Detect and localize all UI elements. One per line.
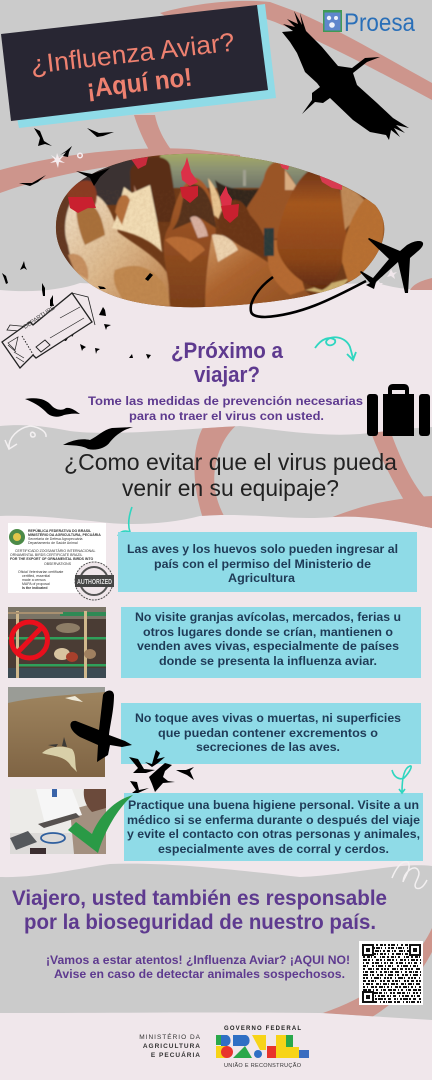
text box: venden aves vivas, especialmente de países <box>137 639 399 653</box>
text box: que puedan contener excrementos o <box>158 726 378 740</box>
text box: No toque aves vivas o muertas, ni superficies <box>135 711 401 725</box>
logo: Proesa: Proesa <box>344 9 415 37</box>
background field <box>160 150 310 188</box>
arrow: white squiggle bottom <box>392 862 427 889</box>
feather texture <box>66 190 272 271</box>
arrow: teal loop to box four <box>392 766 411 793</box>
ticket illustration: DEPARTURE <box>23 305 56 331</box>
closing statement <box>12 887 387 934</box>
text box <box>121 703 421 764</box>
dark tail <box>214 180 258 208</box>
flock of birds top <box>19 128 114 186</box>
pink ribbons top <box>0 1 432 290</box>
hen centre <box>164 178 216 308</box>
banner shadow <box>17 4 276 128</box>
flock of birds trail <box>2 261 153 359</box>
icon: prohibition sign <box>12 622 48 658</box>
text: prevention note <box>88 394 363 423</box>
row 2: markets <box>8 607 421 678</box>
text box: Practique una buena higiene personal. Visite a un <box>128 798 419 812</box>
text box <box>118 532 417 592</box>
icon: plane sparkles <box>375 269 397 288</box>
icon: airplane with trail <box>251 238 423 317</box>
arrow: white squiggle <box>5 426 46 449</box>
heading: como evitar <box>64 449 397 501</box>
hen D pale tail <box>208 178 222 222</box>
hen left wing dark <box>56 194 74 269</box>
QR code <box>359 941 423 1005</box>
top grey area <box>0 0 432 291</box>
hen back right <box>340 186 364 230</box>
document image <box>8 523 114 600</box>
call to action: Avise en caso de detectar animales sospechosos. <box>54 967 345 981</box>
closing statement: por la bioseguridad de nuestro país. <box>24 911 376 934</box>
text box: secreciones de las aves. <box>196 740 340 754</box>
cream hen top <box>112 185 162 252</box>
text box <box>121 607 421 678</box>
doctor photo <box>10 789 106 854</box>
hen D <box>217 200 266 258</box>
document image: ORNAMENTAL BIRDS CERTIFICATE BRAZIL <box>10 553 82 557</box>
heading: próximo a viajar: ¿Próximo a <box>171 338 284 363</box>
text box: médico si se enferma durante o después del viaje <box>127 813 420 827</box>
logo: ministério <box>139 1032 201 1059</box>
title text: ¡Aquí no! <box>85 62 194 103</box>
hen big <box>277 167 346 290</box>
text box: país con el permiso del Ministerio de <box>154 557 371 571</box>
text box: Agricultura <box>228 571 295 585</box>
heading: como evitar: venir en su equipaje? <box>122 475 339 501</box>
finder patterns <box>363 945 420 1002</box>
hen right <box>342 195 384 282</box>
icon: suitcase <box>367 384 430 436</box>
ticket illustration <box>2 293 95 368</box>
hen left head <box>66 180 97 208</box>
logo: ministério: AGRICULTURA <box>143 1043 201 1050</box>
heading: próximo a viajar <box>171 338 284 387</box>
combs and wattles <box>68 157 342 223</box>
text: prevention note: Tome las medidas de prevención necesarias <box>88 394 363 408</box>
hen rear right <box>246 162 294 240</box>
text box <box>124 793 423 861</box>
bottom grey band <box>0 864 432 1020</box>
hen left body <box>65 192 170 310</box>
document image: made a census <box>22 578 46 582</box>
document image: MINISTÉRIO DA AGRICULTURA, PECUÁRIA <box>28 532 101 537</box>
logo: ministério: MINISTÉRIO DA <box>139 1032 201 1041</box>
call to action: ¡Vamos a estar atentos! ¿Influenza Aviar? ¡AQUI NO! <box>46 953 350 967</box>
icon: black cross <box>70 690 132 762</box>
beach photo <box>8 687 105 777</box>
row 4: hygiene <box>10 789 423 861</box>
text box: y evite el contacto con otras personas y animales, <box>127 827 420 841</box>
document image: Secretaria de Defesa Agropecuária <box>28 537 83 541</box>
closing statement: Viajero, usted también es responsable <box>12 887 387 910</box>
hen back centre <box>130 157 180 222</box>
text box: No visite granjas avícolas, mercados, ferias u <box>135 610 401 624</box>
document image: MAPA of proposal <box>22 582 50 586</box>
title banner <box>1 4 276 128</box>
text box: Las aves y los huevos solo pueden ingresar al <box>127 542 398 556</box>
banner panel <box>1 5 268 121</box>
hen foreground <box>205 235 312 312</box>
document image: FOR THE EXPORT OF ORNAMENTAL BIRDS INTO <box>10 557 94 561</box>
row 3: do not touch <box>8 687 421 777</box>
text box: otros lugares donde se crían, mantienen o <box>143 625 393 639</box>
title text: ¿Influenza Aviar? <box>29 27 236 80</box>
market photo <box>8 607 106 678</box>
arrow: teal to first box <box>118 507 132 536</box>
logo: governo federal brasil <box>216 1026 309 1069</box>
text box: especialmente aves de corral y cerdos. <box>158 842 389 856</box>
hen big lower left <box>268 240 305 295</box>
document image: Oficial Veterinarian certificate <box>18 570 63 574</box>
icon: white sparkle <box>50 153 65 168</box>
text: prevention note: para no traer el virus con usted. <box>129 409 324 423</box>
logo: governo federal brasil: GOVERNO FEDERAL <box>224 1026 301 1032</box>
document image: Departamento de Saúde Animal <box>28 541 78 545</box>
document image: CERTIFICADO ZOOSANITÁRIO INTERNACIONAL <box>15 549 95 553</box>
text box: donde se presenta la influenza aviar. <box>159 654 377 668</box>
icon: large bird left <box>25 398 80 417</box>
logo: ministério: E PECUÁRIA <box>151 1050 201 1059</box>
heading: próximo a viajar: viajar? <box>194 362 260 387</box>
authorized stamp: AUTHORIZED <box>77 579 112 586</box>
title text <box>29 27 239 109</box>
pink ribbons middle <box>194 424 432 530</box>
icon: green check mark <box>68 795 133 853</box>
chicken photo <box>50 150 390 312</box>
logo: governo federal brasil: UNIÃO E RECONSTRUÇÃO <box>224 1062 302 1069</box>
flock of geese <box>129 750 194 793</box>
pink ribbon bottom <box>323 928 432 1017</box>
call to action <box>46 953 350 981</box>
heading: como evitar: ¿Como evitar que el virus pueda <box>64 449 397 475</box>
document image: REPÚBLICA FEDERATIVA DO BRASIL <box>28 528 92 533</box>
document image: certified, essential <box>22 574 50 578</box>
icon: large bird right <box>63 427 133 450</box>
document image: OBSERVATIONS <box>44 562 72 566</box>
icon: small white ring <box>78 153 82 158</box>
document image: Is the indicated <box>22 586 47 590</box>
row 1: permit <box>8 523 417 600</box>
arrow: teal squiggle <box>315 337 356 360</box>
middle grey band <box>0 425 432 528</box>
icon: stork silhouette <box>282 11 409 140</box>
